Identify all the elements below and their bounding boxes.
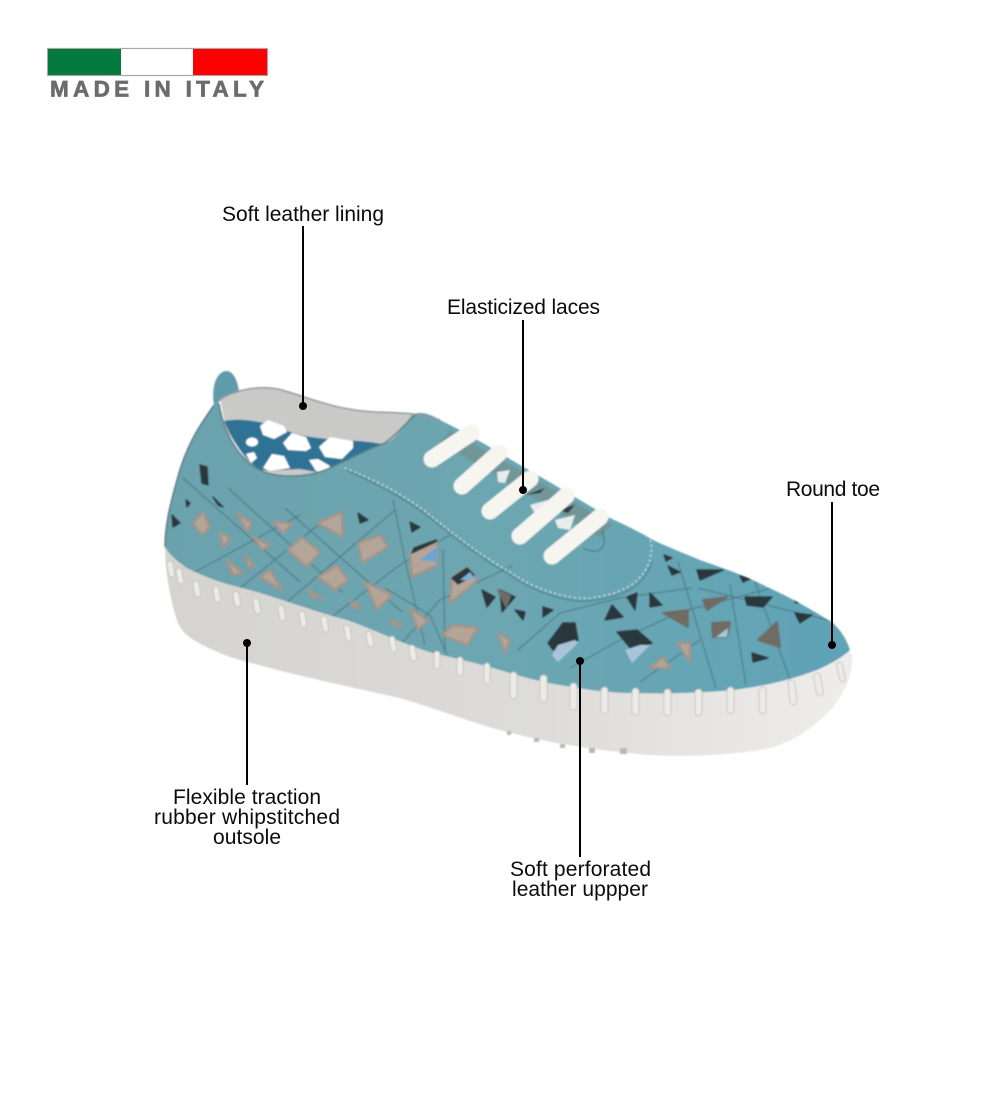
inner lining <box>220 388 440 480</box>
callout: soft leather lining <box>222 203 384 410</box>
callout: outsole: rubber whipstitched <box>154 806 340 829</box>
callout: soft leather lining: Soft leather lining <box>222 203 384 226</box>
laces <box>432 433 600 556</box>
leather upper <box>165 400 850 693</box>
callout: outsole <box>154 639 340 849</box>
callout: perforated upper: Soft perforated <box>510 858 651 881</box>
shoe illustration <box>165 371 852 756</box>
heel tab <box>213 371 239 405</box>
tan cutouts <box>193 512 690 668</box>
callout: perforated upper <box>510 657 651 901</box>
sole tread <box>507 731 627 754</box>
callout: perforated upper: leather uppper <box>512 878 648 901</box>
eyelet stitch loop <box>583 530 604 551</box>
callout: elasticized laces: Elasticized laces <box>447 296 600 319</box>
callout: round toe: Round toe <box>786 478 880 501</box>
grey cutouts <box>498 590 780 647</box>
callout: outsole: Flexible traction <box>173 786 321 809</box>
badge text: MADE IN ITALY <box>50 76 264 102</box>
callout: outsole: outsole <box>213 826 281 849</box>
strap edge hairlines <box>183 478 835 688</box>
dark cutouts <box>172 465 812 662</box>
tongue strip <box>440 430 612 538</box>
inner sock with perforations <box>224 420 382 478</box>
callout: elasticized laces <box>447 296 600 494</box>
badge: made in Italy <box>48 48 268 102</box>
rim edge <box>218 388 440 420</box>
stitching seam <box>345 468 652 598</box>
callout: round toe <box>786 478 880 649</box>
light blue reflections <box>420 547 728 663</box>
whipstitches on sole <box>166 561 846 716</box>
outsole <box>165 545 852 756</box>
flag <box>48 48 268 76</box>
perforated lattice <box>172 465 835 688</box>
